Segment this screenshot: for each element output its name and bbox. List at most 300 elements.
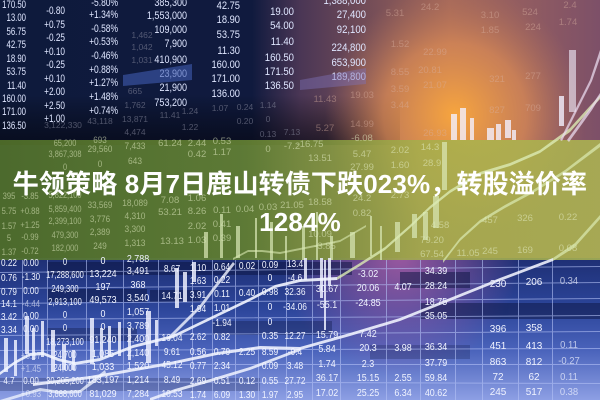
band faded table numbers: 0.11 (213, 205, 231, 216)
bottom table numbers: 0.40 (239, 287, 255, 299)
bottom table numbers: 0.09 (262, 259, 278, 271)
band faded table numbers: 5.75 (2, 205, 17, 216)
top table numbers: 54.00 (270, 20, 294, 32)
bottom table numbers: 9.61 (164, 346, 180, 358)
bottom table numbers: 13.4 (287, 258, 303, 270)
bottom table numbers: 3.98 (394, 342, 412, 354)
faded numbers upper: 1.74 (559, 17, 577, 28)
band faded table numbers: 1.37 (2, 246, 17, 257)
bottom table numbers: 8.67 (164, 263, 180, 275)
band faded table numbers: 65,200 (54, 137, 77, 148)
bottom table numbers: 40.62 (425, 387, 447, 399)
top table numbers: +0.10 (44, 46, 66, 58)
background stock market photo: 1,462 (131, 30, 153, 40)
top table numbers: 18.90 (217, 14, 240, 26)
bottom table numbers: 1.63 (190, 275, 206, 287)
top table numbers: 7,900 (164, 38, 187, 50)
top table numbers: 56.75 (7, 26, 26, 38)
bottom table numbers: 37.79 (425, 357, 447, 369)
faded numbers upper: 321 (489, 74, 505, 85)
bottom table numbers: 2,913,100 (48, 296, 82, 307)
band faded table numbers: 1.17 (213, 147, 231, 158)
bottom table numbers: 1.10 (190, 262, 206, 274)
bottom table numbers: 4.07 (394, 281, 412, 293)
bottom table numbers: 0 (63, 309, 67, 320)
band faded table numbers: 249 (93, 240, 107, 251)
band faded table numbers: 1.06 (188, 193, 206, 204)
top table numbers: 11.40 (271, 36, 294, 48)
band faded table numbers: 457 (482, 215, 498, 226)
bottom table numbers: 0.51 (214, 375, 230, 387)
top table numbers: 53.75 (217, 29, 240, 41)
bottom table numbers: 45.12 (161, 359, 183, 371)
bottom table numbers: 0.00 (23, 257, 39, 268)
bottom table numbers: 1,520 (127, 360, 150, 372)
bottom table numbers: 2.62 (190, 331, 206, 343)
background stock market photo: 3,122,330 (44, 120, 82, 130)
bottom table numbers: 0 (101, 255, 106, 267)
top table numbers: 18.90 (7, 53, 26, 65)
bottom table numbers: 0.64 (214, 261, 230, 273)
bottom table numbers: 2.69 (190, 375, 206, 387)
band faded table numbers (2, 133, 577, 260)
faded numbers upper: 524 (522, 7, 538, 18)
band faded table numbers: 643 (128, 156, 142, 166)
bottom table numbers: +1.45 (21, 363, 41, 374)
green title band (0, 140, 600, 260)
bottom table numbers: 12.27 (284, 330, 306, 342)
bottom table numbers: -24.85 (355, 297, 381, 309)
bottom table numbers: 36.17 (316, 372, 338, 384)
bottom table numbers: 0 (268, 316, 272, 328)
faded numbers upper: 3.44 (391, 100, 409, 111)
bottom table numbers: 2,788 (127, 253, 149, 265)
top table numbers: 109,000 (154, 24, 187, 36)
faded numbers upper: 21.07 (423, 80, 447, 91)
bottom table numbers: 24,000 (53, 362, 77, 373)
top table numbers: 23,900 (159, 68, 187, 80)
bottom blue table panel (0, 258, 600, 400)
faded numbers upper: 11.43 (313, 94, 337, 105)
band faded table numbers: 0.22 (559, 212, 577, 223)
bottom table numbers: 451 (490, 341, 507, 352)
top table numbers: -0.25 (46, 59, 65, 71)
bottom table numbers: 0.12 (239, 375, 255, 387)
faded numbers upper: 26.93 (423, 128, 447, 139)
faded numbers upper: 3.10 (481, 10, 499, 21)
bottom table numbers: 27.72 (284, 375, 306, 387)
bottom table numbers: 2.3 (362, 358, 374, 370)
title: 1284% (259, 207, 341, 237)
bottom table numbers: +0.37 (21, 350, 41, 361)
band faded table numbers: 28.9 (423, 158, 441, 169)
band faded table numbers: -7.2 (284, 141, 300, 152)
band faded table numbers: 10.09 (308, 229, 332, 240)
background stock market photo: 1,031 (131, 55, 153, 65)
top table numbers: 160.00 (2, 93, 26, 105)
band faded table numbers: 245 (482, 246, 498, 257)
top table numbers: 136.50 (265, 80, 294, 92)
bottom table numbers: 32.36 (284, 286, 306, 298)
top table numbers: 171.00 (2, 106, 26, 118)
band faded table numbers: 53.21 (158, 207, 182, 218)
bottom table numbers: 0.76 (1, 271, 17, 283)
band faded table numbers: 8.26 (188, 206, 206, 217)
top table numbers: 11.40 (7, 80, 26, 92)
bottom table numbers: 0.00 (23, 285, 39, 296)
bottom table numbers: 0 (63, 256, 67, 267)
bottom table numbers: -0.4 (288, 346, 302, 358)
bottom table numbers: 0.77 (190, 360, 206, 372)
bottom table numbers: 1.01 (214, 302, 230, 314)
bottom table numbers: 3.34 (1, 323, 17, 335)
band faded table numbers: 0.82 (353, 208, 371, 219)
band faded table numbers: 3,867,308 (49, 148, 82, 159)
bottom table numbers: 2.34 (214, 360, 230, 372)
bottom table numbers (1, 253, 580, 400)
band faded table numbers: 2.73 (391, 190, 409, 201)
faded numbers upper: 709 (525, 103, 541, 114)
bottom table numbers: 0 (101, 308, 106, 320)
faded numbers upper: 24.2 (421, 2, 439, 13)
background stock market photo: 0.20 (237, 116, 254, 126)
faded numbers upper: 5.31 (386, 8, 404, 19)
top table numbers: 136.00 (211, 88, 240, 100)
top table numbers: 42.75 (217, 0, 240, 12)
top table numbers: 19.00 (270, 6, 294, 18)
band faded table numbers: +0.88 (20, 205, 40, 216)
top table numbers: -0.25 (46, 32, 65, 44)
bottom table numbers: 0.38 (560, 387, 579, 398)
band faded table numbers: 395 (3, 190, 16, 201)
bottom table numbers: 5.84 (318, 343, 336, 355)
top table numbers: 224,800 (331, 42, 366, 54)
band faded table numbers: 3,300 (125, 224, 145, 234)
bottom table numbers: 14.71 (161, 290, 183, 302)
bottom table numbers: 30.67 (316, 283, 338, 295)
bottom table numbers: 358 (526, 323, 543, 334)
background stock market photo: 1.22 (182, 122, 199, 132)
bottom table numbers: 28.24 (425, 280, 448, 292)
bottom table numbers: 0.35 (262, 330, 278, 342)
top table numbers: -0.80 (46, 5, 66, 17)
top table numbers: +2.50 (44, 100, 66, 112)
band faded table numbers: 2,389 (90, 226, 110, 237)
bottom table numbers: 0.82 (214, 331, 230, 343)
top table numbers: 92,100 (337, 24, 366, 36)
bottom table numbers: 1,085 (92, 348, 114, 360)
bottom table numbers: 3,491 (127, 265, 149, 277)
bottom table numbers: 812 (526, 357, 543, 368)
bottom table numbers: 8.49 (164, 374, 180, 386)
band faded table numbers: 169 (517, 245, 533, 256)
bottom table numbers: 62 (528, 372, 540, 383)
top table numbers: +1.34% (89, 9, 118, 21)
faded numbers upper: 8.55 (391, 67, 409, 78)
top table numbers: 171.00 (211, 73, 240, 85)
bottom table numbers: 0.22 (1, 256, 17, 268)
bottom table numbers: 49,573 (89, 294, 117, 306)
bottom table numbers: 35.05 (425, 310, 447, 322)
bottom table numbers: 18.75 (425, 296, 447, 308)
faded numbers upper: 19.03 (350, 90, 374, 101)
band faded table numbers: 7.08 (161, 195, 179, 206)
top table numbers: 136.50 (2, 120, 26, 132)
band faded table numbers: -3.85 (21, 190, 39, 201)
top table numbers: 160.50 (265, 52, 294, 64)
bottom table numbers: 7,284 (127, 388, 150, 400)
bottom table numbers: 0.55 (262, 375, 278, 387)
faded numbers upper: 277 (525, 71, 541, 82)
bottom table numbers: 59.84 (425, 372, 448, 384)
faded numbers upper: 2.4 (563, 0, 577, 11)
bottom table numbers: 0.09 (262, 360, 278, 372)
faded numbers upper: 14.99 (350, 119, 374, 130)
top table numbers: +0.88% (89, 64, 118, 76)
bottom table numbers: 0.00 (23, 375, 39, 386)
background stock market photo: 13,871 (122, 114, 148, 124)
bottom table numbers: 0.98 (262, 286, 278, 298)
background stock market photo: 665 (128, 86, 142, 96)
band faded table numbers: 0.53 (213, 136, 231, 147)
top table numbers: 171.50 (265, 66, 294, 78)
top table numbers: 27,400 (337, 9, 366, 21)
bottom table numbers: 0.56 (190, 346, 206, 358)
band faded table numbers: 0.08 (559, 243, 577, 254)
faded numbers upper: 1.85 (481, 25, 499, 36)
top table numbers: +1.27% (89, 77, 118, 89)
bottom table numbers: 72 (492, 372, 504, 383)
bottom table numbers: -0.27 (558, 356, 580, 367)
band faded table numbers: 4.58 (431, 220, 449, 231)
bottom table numbers: 1.74 (318, 358, 336, 370)
faded numbers upper: 1.52 (391, 39, 409, 50)
band faded table numbers: 693 (93, 134, 107, 145)
bottom table numbers: 10.53 (161, 388, 183, 400)
top table numbers: 1,553,000 (147, 10, 187, 22)
top table numbers: 42.75 (7, 39, 26, 51)
background stock market photo: 1,762 (124, 100, 146, 110)
top table numbers: +0.53% (89, 36, 118, 48)
bottom table numbers: 1,033 (92, 361, 114, 373)
background stock market photo: 4,474 (124, 127, 146, 137)
background stock market photo: 43,118 (87, 116, 113, 126)
top table numbers: -0.46% (91, 50, 118, 62)
background stock market photo: 1.24 (182, 106, 199, 116)
background stock market photo: 7.13 (284, 127, 301, 137)
band faded table numbers: 79.20 (420, 235, 444, 246)
band faded table numbers: 13.13 (160, 236, 184, 247)
bottom table numbers: -3.02 (358, 268, 378, 280)
bottom table numbers: 0.22 (214, 274, 230, 286)
bottom table numbers: 206 (526, 277, 543, 288)
band faded table numbers: 27.99 (350, 162, 374, 173)
bottom table numbers: 3,888,600 (48, 388, 82, 399)
top table numbers: +2.00 (44, 86, 66, 98)
band faded table numbers: 0 (265, 144, 271, 155)
bottom table numbers: 863 (490, 357, 507, 368)
bottom table numbers: 8.59 (262, 346, 278, 358)
top table numbers: 189,800 (331, 71, 366, 83)
bottom table numbers: 3.91 (190, 289, 206, 301)
band faded table numbers: 33,569 (88, 199, 112, 210)
band faded table numbers: -0.99 (21, 231, 39, 242)
bottom table numbers: 1.94 (190, 303, 206, 315)
bottom table numbers: 81,029 (89, 388, 117, 400)
band faded table numbers: 5,822,100 (49, 189, 82, 200)
bottom table numbers: 0.02 (239, 260, 255, 272)
bottom table numbers: 24,700 (53, 349, 77, 360)
bottom table numbers: 34.39 (425, 265, 447, 277)
top table numbers: +0.75 (44, 19, 65, 31)
bottom table numbers: 2.55 (394, 372, 412, 384)
faded numbers upper (313, 0, 577, 139)
background stock market photo: 0.24 (237, 102, 254, 112)
highlighted row (123, 64, 366, 90)
faded numbers upper: 5.27 (316, 123, 334, 134)
bottom table numbers: 36.34 (425, 341, 448, 353)
bottom table numbers: 3.42 (1, 310, 17, 322)
top table numbers: +0.10 (44, 73, 66, 85)
band faded table numbers: -6.08 (351, 133, 373, 144)
bottom table numbers: 13,224 (89, 268, 117, 280)
bottom table numbers: 0 (101, 321, 106, 333)
band faded table numbers: -3.85 (314, 241, 336, 252)
top table numbers (2, 0, 366, 132)
bottom table numbers: 0.11 (560, 372, 578, 383)
top table numbers: +1.00 (44, 113, 66, 125)
band faded table numbers: 67.54 (420, 249, 444, 260)
bottom table numbers: 18,273,100 (46, 336, 84, 347)
bottom table numbers: -34.06 (283, 301, 307, 313)
bottom table numbers: 25.25 (357, 387, 379, 399)
bottom table numbers: 16.04 (161, 332, 183, 344)
bottom table numbers: 0 (268, 272, 272, 284)
bottom table numbers: 30,205,200 (46, 375, 84, 386)
band faded table numbers: 7,433 (125, 141, 145, 151)
bottom table numbers: 517 (526, 387, 543, 398)
bottom table numbers: 249,300 (51, 283, 79, 294)
bottom table numbers: -4.44 (22, 298, 40, 309)
bottom table numbers: 183,197 (87, 374, 119, 386)
band faded table numbers: -16.75 (297, 139, 323, 150)
bottom table numbers: 15.79 (316, 329, 338, 341)
band faded table numbers: 2.44 (188, 138, 206, 149)
band faded table numbers: 2.02 (188, 221, 206, 232)
band faded table numbers: 0 (98, 158, 102, 169)
top table numbers: 410,900 (154, 54, 187, 66)
band faded table numbers: 14.3 (421, 142, 439, 153)
bottom table numbers: 2.25 (239, 346, 255, 358)
background stock market photo: 1.07 (212, 103, 229, 113)
bottom table numbers: -1.94 (212, 317, 232, 329)
band faded table numbers: 11.05 (456, 248, 480, 259)
bottom table numbers: 0.11 (560, 340, 578, 351)
band faded table numbers: 4,310 (125, 211, 145, 221)
bottom table numbers: 0 (268, 301, 272, 313)
top table numbers: 11.30 (217, 45, 240, 57)
top table numbers: 53.75 (7, 66, 26, 78)
candlestick chart (4, 50, 576, 376)
top dark panel (0, 0, 600, 260)
top table numbers: +1.48% (89, 91, 118, 103)
background stock market photo: 1.14 (260, 100, 277, 110)
top table numbers: 160.00 (211, 59, 240, 71)
bottom table numbers: 20.06 (357, 282, 379, 294)
faded numbers upper: 22.99 (423, 47, 447, 58)
faded numbers upper: 224 (525, 22, 541, 33)
title (13, 169, 587, 237)
band faded table numbers: 0.39 (213, 233, 231, 244)
faded numbers upper: 20.81 (418, 65, 442, 76)
top table numbers: +0.74% (89, 105, 118, 117)
band faded table numbers: 18,089 (122, 198, 148, 208)
band faded table numbers: 29,560 (88, 143, 112, 154)
bottom table numbers: 2,140 (127, 347, 150, 359)
bottom table numbers: 0.11 (214, 288, 230, 300)
bottom table numbers: 20.3 (359, 342, 377, 354)
bottom table numbers: 0.00 (23, 323, 39, 334)
band faded table numbers: +1.25 (20, 219, 40, 230)
bottom table numbers: -4.6 (288, 272, 302, 284)
bottom table numbers: 6.34 (394, 387, 412, 399)
bottom table numbers: 3.48 (287, 360, 303, 372)
bottom table numbers: 0.34 (560, 276, 579, 287)
bottom table numbers: 0 (63, 322, 67, 333)
band faded table numbers: 61.24 (158, 138, 182, 149)
bottom table numbers: 7.42 (359, 328, 377, 340)
bottom table numbers: 3,540 (127, 292, 150, 304)
bottom table numbers: 197 (96, 281, 110, 293)
band faded table numbers: 21.05 (280, 200, 304, 211)
bottom table numbers: -55.1 (317, 299, 337, 311)
band faded table numbers: 5 (7, 232, 11, 243)
band faded table numbers: 326 (517, 213, 533, 224)
bottom table numbers: 17,288,600 (46, 269, 84, 280)
band faded table numbers: 2,399,100 (49, 215, 82, 226)
top table numbers: 753,200 (154, 97, 187, 109)
band faded table numbers: -0.72 (21, 245, 39, 256)
background stock market photo: 0 (266, 114, 271, 124)
band faded table numbers: 0.41 (213, 219, 231, 230)
bottom table numbers: 15.15 (357, 372, 379, 384)
bottom table numbers: 0.00 (23, 310, 39, 321)
band faded table numbers: 24.2 (353, 193, 371, 204)
title: 牛领策略 8月7日鹿山转债下跌023%，转股溢价率 (13, 169, 587, 199)
band faded table numbers: 0.03 (259, 202, 277, 213)
top table numbers: 21,900 (159, 82, 187, 94)
top table numbers: 13.00 (7, 12, 26, 24)
bottom table numbers: 368 (131, 279, 145, 291)
background stock market photo: 0.13 (260, 129, 277, 139)
bottom table numbers: 413 (526, 341, 543, 352)
band faded table numbers: 479,300 (52, 229, 79, 240)
background stock market photo: 1,042 (131, 42, 153, 52)
band faded table numbers: 5,859,400 (49, 203, 82, 214)
band faded table numbers: 13.51 (308, 153, 332, 164)
band faded table numbers: 0 (63, 161, 67, 172)
top table numbers: -0.58% (91, 23, 118, 35)
band faded table numbers: 18.58 (308, 197, 332, 208)
band faded table numbers: 3,776 (90, 213, 110, 224)
band faded table numbers: 1.03 (188, 235, 206, 246)
band faded table numbers: 2.02 (391, 145, 409, 156)
bottom table numbers: 2,400 (127, 333, 150, 345)
bottom table numbers: 17.02 (316, 387, 338, 399)
band faded table numbers: 0.04 (236, 204, 254, 215)
bottom table numbers: +0.93 (21, 388, 41, 399)
band faded table numbers: 1.60 (391, 160, 409, 171)
